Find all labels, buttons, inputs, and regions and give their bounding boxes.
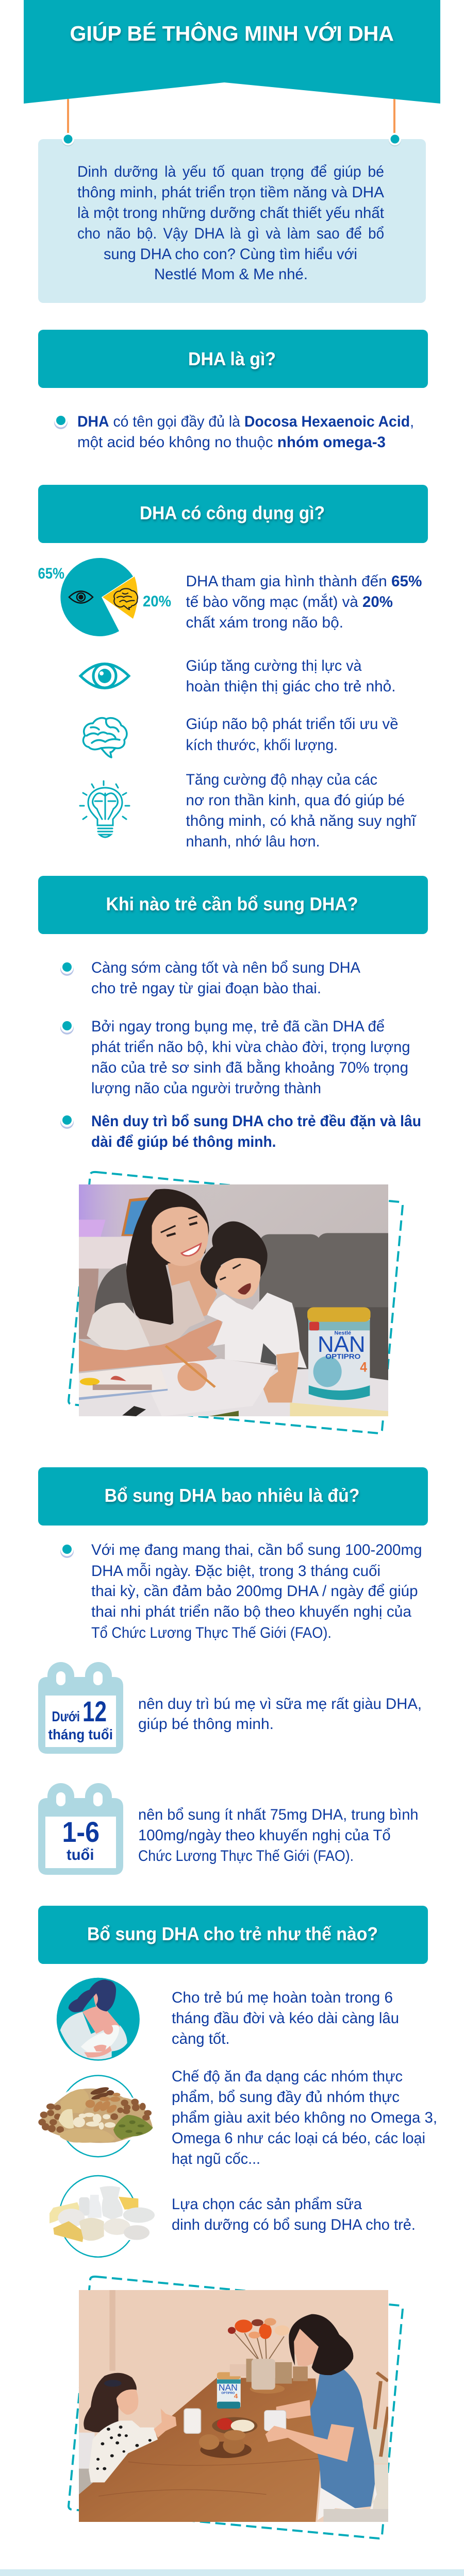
heading: công dụng: [38, 485, 428, 543]
text: eyesight: [186, 657, 396, 695]
text: brain: Giúp não bộ phát triển tối ưu về: [186, 716, 398, 733]
intro hanging panel: [38, 99, 426, 303]
definition bullet: DHA có tên gọi đầy đủ là Docosa Hexaenoic Acid,: [77, 413, 414, 430]
text: dairy: dinh dưỡng có bổ sung DHA cho trẻ.: [172, 2216, 416, 2233]
text: breastfeeding: [172, 1989, 399, 2047]
text: brain: [186, 716, 398, 754]
text: diet: phẩm, bổ sung đầy đủ nhóm thực: [172, 2089, 400, 2106]
text: neurons: Tăng cường độ nhạy của các: [186, 771, 377, 788]
dashed photo frame 1: [69, 1172, 403, 1433]
list: when to supplement: cho trẻ ngay từ giai đoạn bào thai.: [91, 980, 321, 997]
text: under 12 months: giúp bé thông minh.: [138, 1716, 274, 1733]
intro text: cho não bộ. Vậy DHA là gì và làm sao để bổ: [77, 225, 384, 242]
text: breastfeeding: tháng đầu đời và kéo dài càng lâu: [172, 2010, 399, 2027]
text: diet: Chế độ ăn đa dạng các nhóm thực: [172, 2068, 403, 2085]
photo: mother and son with NAN can: 4: [360, 1360, 367, 1375]
intro text: Nestlé Mom & Me nhé.: [154, 266, 308, 283]
list: when to supplement: dài để giúp bé thông minh.: [91, 1133, 276, 1150]
final panel background: [0, 2569, 464, 2576]
text: 65% 20%: tế bào võng mạc (mắt) và 20%: [186, 594, 393, 611]
icon: eye: [80, 664, 129, 688]
list: when to supplement: [60, 959, 421, 1150]
heading: DHA là gì: DHA là gì?: [188, 348, 276, 369]
title text: GIÚP BÉ THÔNG MINH VỚI DHA: [70, 22, 394, 45]
text: breastfeeding: Cho trẻ bú mẹ hoàn toàn trong 6: [172, 1989, 393, 2006]
photo: mother and son with NAN can: [79, 1184, 396, 1416]
text: dairy: Lựa chọn các sản phẩm sữa: [172, 2196, 362, 2213]
illustration: dairy products: [49, 2176, 155, 2257]
list: pregnant mothers: thai nhi phát triển não bộ theo khuyến nghị của: [91, 1603, 411, 1620]
heading: bao nhiêu: [38, 1467, 428, 1526]
icon: small eye: [69, 591, 93, 603]
illustration: breastfeeding mother: [57, 1978, 140, 2061]
list: pregnant mothers: thai kỳ, cần đảm bảo 200mg DHA / ngày để giúp: [91, 1583, 418, 1600]
calendar icon: 1-6 years: [38, 1783, 123, 1875]
heading: bao nhiêu: Bổ sung DHA bao nhiêu là đủ?: [105, 1485, 359, 1506]
text: 65% 20%: DHA tham gia hình thành đến 65%: [186, 573, 422, 590]
icon: brain: [83, 718, 127, 757]
text: neurons: [186, 771, 417, 850]
text: 1-6 years: 100mg/ngày theo khuyến nghị của Tổ: [138, 1827, 391, 1844]
photo: mother and son with NAN can: Nestlé: [335, 1330, 351, 1336]
calendar icon: under 12 months: [38, 1662, 123, 1754]
text: neurons: nhanh, nhớ lâu hơn.: [186, 833, 320, 850]
list: pregnant mothers: DHA mỗi ngày. Đặc biệt, trong 3 tháng cuối: [91, 1563, 380, 1580]
calendar icon: under 12 months: Dưới: [52, 1708, 80, 1724]
title banner: [24, 0, 440, 104]
intro text: [77, 163, 385, 283]
text: eyesight: hoàn thiện thị giác cho trẻ nhỏ.: [186, 678, 396, 695]
list: when to supplement: não của trẻ sơ sinh đã bằng khoảng 70% trọng: [91, 1059, 408, 1076]
pie chart 65% and 20%: [38, 558, 171, 636]
text: diet: phẩm giàu axit béo không no Omega 3,: [172, 2109, 437, 2126]
text: diet: hạt ngũ cốc...: [172, 2150, 260, 2167]
heading: khi nào: Khi nào trẻ cần bổ sung DHA?: [106, 893, 358, 914]
heading: như thế nào: [38, 1906, 428, 1964]
text: under 12 months: [138, 1696, 422, 1733]
definition bullet: một acid béo không no thuộc nhóm omega-3: [77, 434, 386, 451]
photo: mother and daughter at table: OPTIPRO: [221, 2392, 235, 2395]
calendar icon: 1-6 years: tuổi: [67, 1846, 94, 1863]
definition bullet: [54, 413, 414, 451]
photo: mother and daughter at table: NAN: [219, 2382, 238, 2393]
text: 65% 20%: [186, 573, 422, 631]
icon: small brain: [114, 588, 138, 609]
heading: khi nào: [38, 876, 428, 934]
intro text: là một trong những dưỡng chất thiết yếu nhất: [77, 205, 385, 222]
photo: mother and daughter at table: 4: [234, 2393, 238, 2400]
text: 65% 20%: chất xám trong não bộ.: [186, 614, 343, 631]
list: when to supplement: phát triển não bộ, khi vừa chào đời, trọng lượng: [91, 1039, 410, 1056]
text: eyesight: Giúp tăng cường thị lực và: [186, 657, 362, 674]
list: pregnant mothers: Với mẹ đang mang thai, cần bổ sung 100-200mg: [91, 1541, 422, 1558]
intro text: sung DHA cho con? Cùng tìm hiểu với: [104, 246, 357, 263]
text: neurons: thông minh, có khả năng suy nghĩ: [186, 812, 417, 829]
label 20%: 20%: [143, 593, 171, 610]
list: when to supplement: Bởi ngay trong bụng mẹ, trẻ đã cần DHA để: [91, 1018, 385, 1035]
text: brain: kích thước, khối lượng.: [186, 737, 338, 754]
text: dairy: [172, 2196, 416, 2233]
heading: DHA là gì: [38, 330, 428, 388]
calendar icon: 1-6 years: 1-6: [62, 1816, 100, 1848]
text: 1-6 years: nên bổ sung ít nhất 75mg DHA, trung bình: [138, 1806, 419, 1823]
list: pregnant mothers: Tổ Chức Lương Thực Thế Giới (FAO).: [91, 1624, 332, 1641]
list: pregnant mothers: [60, 1541, 422, 1641]
photo: mother and daughter at table: [79, 2290, 389, 2522]
heading: công dụng: DHA có công dụng gì?: [140, 502, 325, 523]
text: diet: Omega 6 như các loại cá béo, các loại: [172, 2130, 425, 2147]
calendar icon: under 12 months: tháng tuổi: [48, 1726, 113, 1742]
intro text: thông minh, phát triển trọn tiềm năng và DHA: [77, 184, 384, 201]
text: under 12 months: nên duy trì bú mẹ vì sữa mẹ rất giàu DHA,: [138, 1696, 422, 1713]
icon: light bulb: [80, 781, 129, 837]
text: 1-6 years: [138, 1806, 419, 1865]
intro text: Dinh dưỡng là yếu tố quan trọng để giúp bé: [77, 163, 384, 180]
heading: như thế nào: Bổ sung DHA cho trẻ như thế nào?: [87, 1923, 378, 1944]
label 65%: 65%: [38, 565, 64, 582]
text: 1-6 years: Chức Lương Thực Thế Giới (FAO).: [138, 1848, 354, 1865]
dashed photo frame 2: [69, 2277, 403, 2538]
photo: mother and son with NAN can: NAN: [318, 1332, 366, 1357]
list: when to supplement: lượng não của người trưởng thành: [91, 1080, 321, 1097]
photo: mother and son with NAN can: OPTIPRO: [325, 1352, 361, 1361]
text: neurons: nơ ron thần kinh, qua đó giúp bé: [186, 792, 405, 809]
illustration: nuts: [38, 2075, 154, 2157]
text: diet: [172, 2068, 437, 2167]
text: breastfeeding: càng tốt.: [172, 2030, 230, 2047]
list: when to supplement: Càng sớm càng tốt và nên bổ sung DHA: [91, 959, 360, 976]
calendar icon: under 12 months: 12: [82, 1695, 107, 1727]
list: when to supplement: Nên duy trì bổ sung DHA cho trẻ đều đặn và lâu: [91, 1113, 421, 1130]
